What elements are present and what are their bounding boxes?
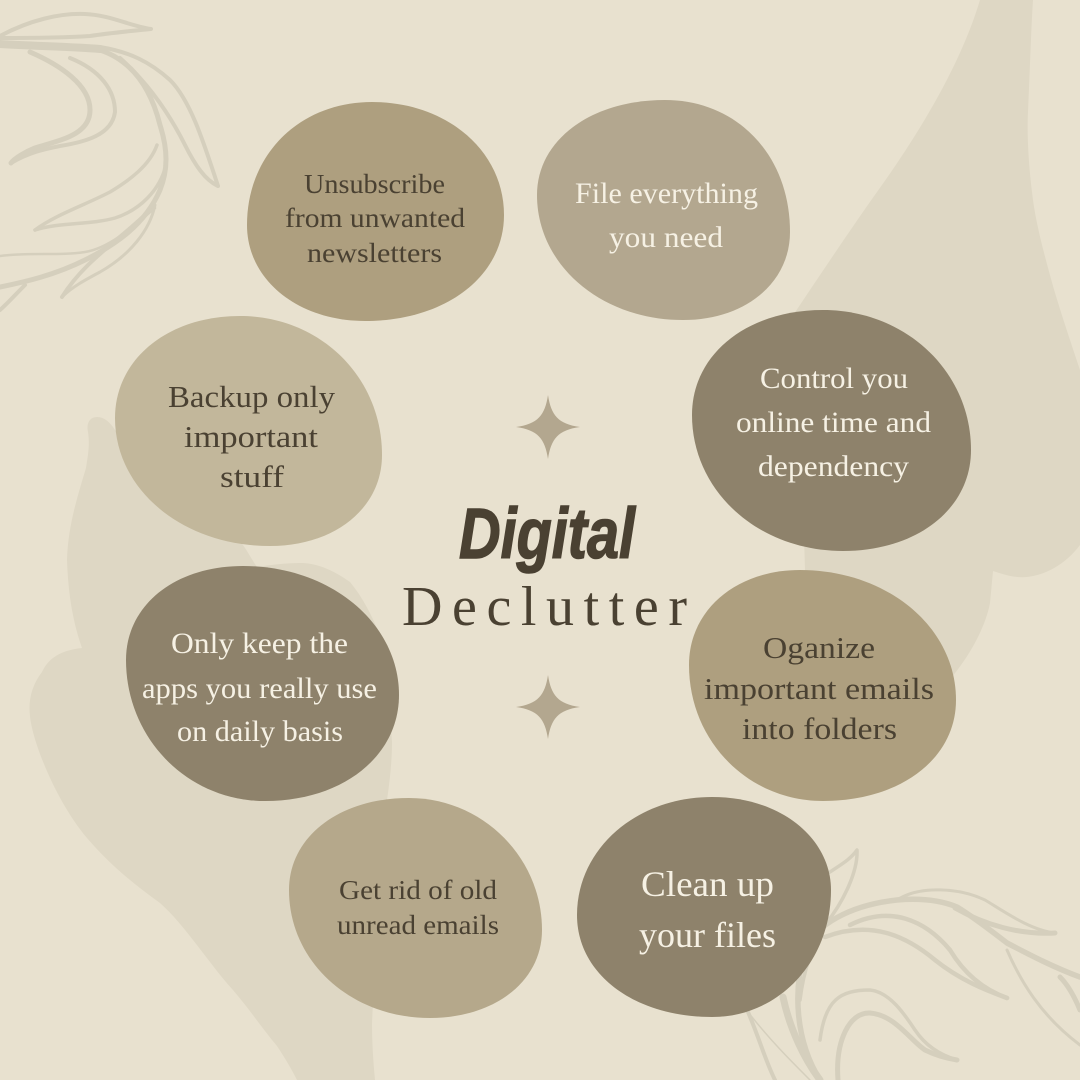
title: Digital: Digital — [459, 495, 636, 574]
text: organize emails — [704, 630, 934, 746]
text: unsubscribe: Unsubscribe — [304, 169, 445, 199]
panel: clean up files — [577, 797, 831, 1017]
text: keep apps — [142, 627, 377, 748]
panel: unsubscribe — [247, 102, 504, 321]
decoration: bottom-right leaves — [748, 850, 1080, 1080]
text: organize emails: important emails — [704, 671, 934, 706]
decoration: top-left leaves — [0, 14, 218, 310]
text: keep apps: Only keep the — [171, 627, 348, 660]
text: file everything: File everything — [575, 177, 758, 210]
text: file everything — [575, 177, 758, 254]
text: old unread emails — [337, 875, 499, 940]
text: control online time: Control you — [760, 362, 908, 395]
text: old unread emails: unread emails — [337, 910, 499, 940]
text: unsubscribe: newsletters — [307, 238, 442, 268]
icon: lower sparkle — [516, 675, 580, 739]
panel: file everything — [537, 100, 790, 320]
background shape: left petal — [30, 417, 392, 1080]
text: organize emails: Oganize — [763, 630, 875, 665]
text: organize emails: into folders — [742, 711, 897, 746]
text: clean up files: your files — [639, 915, 776, 955]
panel: keep apps — [126, 566, 399, 801]
text: unsubscribe: from unwanted — [285, 203, 466, 233]
text: keep apps: on daily basis — [177, 715, 343, 748]
panel: control online time — [692, 310, 971, 551]
text: backup: important — [184, 419, 318, 454]
title: Declutter: Declutter — [402, 576, 687, 638]
text: control online time — [736, 362, 931, 483]
text: unsubscribe — [285, 169, 466, 268]
background shape: right petal — [790, 0, 1080, 720]
text: keep apps: apps you really use — [142, 672, 377, 705]
text: old unread emails: Get rid of old — [339, 875, 498, 905]
text: backup — [168, 379, 336, 494]
text: backup: stuff — [220, 459, 285, 494]
title — [402, 495, 687, 638]
panel: backup — [115, 316, 382, 546]
text: control online time: dependency — [758, 450, 909, 483]
text: file everything: you need — [609, 221, 723, 254]
panel: organize emails — [689, 570, 956, 801]
text: backup: Backup only — [168, 379, 336, 414]
text: clean up files — [639, 864, 776, 955]
icon: upper sparkle — [516, 395, 580, 459]
text: control online time: online time and — [736, 406, 931, 439]
text: clean up files: Clean up — [641, 864, 774, 904]
panel: old unread emails — [289, 798, 542, 1018]
